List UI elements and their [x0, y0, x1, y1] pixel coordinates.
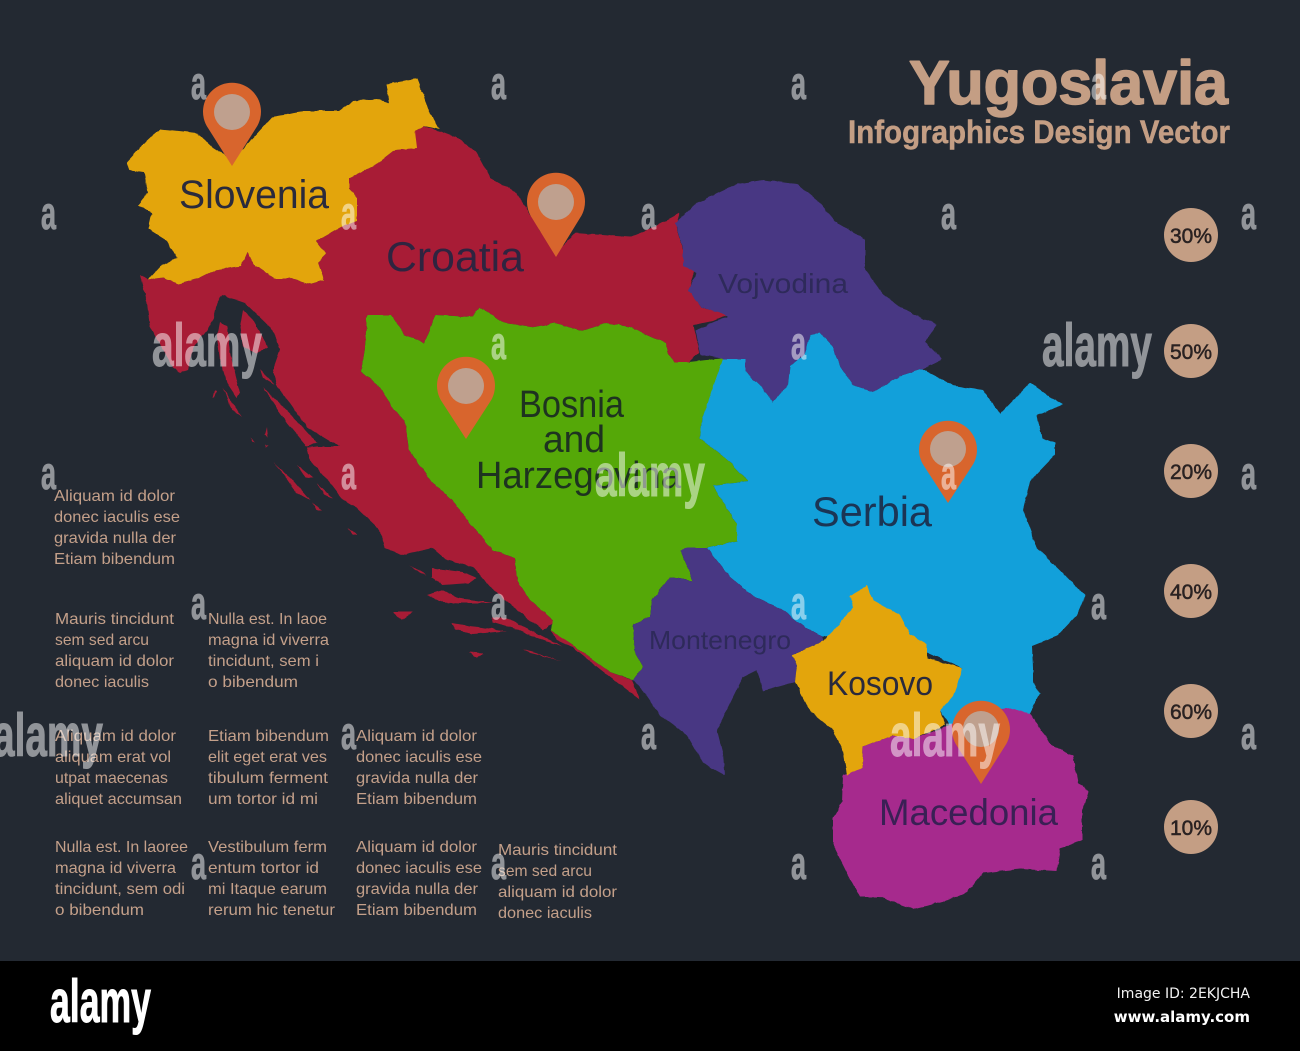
watermark pattern: a — [341, 187, 356, 239]
map of Yugoslavia — [127, 79, 1088, 909]
region: Montenegro — [633, 548, 823, 775]
badge 40%: 40% — [1170, 581, 1212, 604]
watermark wordmarks — [0, 312, 1152, 769]
watermark pattern: a — [491, 577, 506, 629]
text block 5: elit eget erat ves — [208, 749, 327, 766]
watermark pattern: a — [1091, 577, 1106, 629]
text block 3 — [208, 611, 329, 691]
badge 30% — [1164, 208, 1218, 262]
text block 2: donec iaculis — [55, 674, 149, 691]
text block 1: Etiam bibendum — [54, 551, 175, 568]
watermark pattern: a — [341, 707, 356, 759]
website: www.alamy.com — [1114, 1008, 1250, 1026]
watermark pattern: a — [491, 837, 506, 889]
text block 9: gravida nulla der — [356, 881, 479, 898]
watermark pattern: a — [341, 447, 356, 499]
text block 1: donec iaculis ese — [54, 509, 180, 526]
country label: Bosnia and Harzegovina: and — [543, 419, 605, 461]
watermark pattern: a — [791, 317, 806, 369]
region: Kosovo — [792, 586, 963, 775]
watermark pattern: a — [791, 57, 806, 109]
text block 5: tibulum ferment — [208, 770, 329, 787]
text block 8: mi Itaque earum — [208, 881, 327, 898]
text block 9: Etiam bibendum — [356, 902, 477, 919]
country label: Bosnia and Harzegovina: Bosnia — [519, 384, 625, 426]
region: Croatia — [140, 126, 727, 700]
text block 8 — [208, 839, 336, 919]
watermark pattern: a — [1241, 707, 1256, 759]
watermark wordmarks: alamy — [152, 312, 262, 379]
islands — [240, 310, 268, 353]
watermark pattern: a — [491, 317, 506, 369]
watermark pattern: a — [1241, 447, 1256, 499]
text block 7: Nulla est. In laoree — [55, 839, 188, 856]
watermark pattern: a — [191, 837, 206, 889]
text block 8: Vestibulum ferm — [208, 839, 327, 856]
text block 6 — [356, 728, 482, 808]
watermark pattern: a — [941, 447, 956, 499]
text block 3: Nulla est. In laoe — [208, 611, 327, 628]
text block 4: aliquam erat vol — [55, 749, 171, 766]
text block 10 — [498, 842, 618, 922]
region: Vojvodina — [675, 180, 942, 402]
country label: Vojvodina: Vojvodina — [718, 268, 848, 299]
text block 1: gravida nulla der — [54, 530, 177, 547]
pin: Slovenia — [203, 83, 261, 166]
text block 4: Aliquam id dolor — [55, 728, 177, 745]
badge 50% — [1164, 324, 1218, 378]
watermark pattern: a — [641, 187, 656, 239]
watermark pattern: a — [41, 187, 56, 239]
watermark pattern: a — [1091, 57, 1106, 109]
text block 6: gravida nulla der — [356, 770, 479, 787]
text block 7: magna id viverra — [55, 860, 176, 877]
watermark pattern: a — [491, 57, 506, 109]
text block 10: sem sed arcu — [498, 863, 592, 880]
watermark wordmarks: alamy — [890, 702, 1000, 769]
text block 9 — [356, 839, 482, 919]
percent badges — [1164, 208, 1218, 854]
text block 8: entum tortor id — [208, 860, 319, 877]
text block 8: rerum hic tenetur — [208, 902, 336, 919]
text block 4: utpat maecenas — [55, 770, 168, 787]
text block 1: Aliquam id dolor — [54, 488, 176, 505]
text block 9: donec iaculis ese — [356, 860, 482, 877]
badge 10% — [1164, 800, 1218, 854]
badge 60%: 60% — [1170, 701, 1212, 724]
watermark pattern: a — [791, 837, 806, 889]
badge 60% — [1164, 684, 1218, 738]
text block 7: tincidunt, sem odi — [55, 881, 185, 898]
region: Macedonia — [833, 708, 1088, 909]
text block 6: Aliquam id dolor — [356, 728, 478, 745]
country label: Bosnia and Harzegovina — [476, 384, 682, 497]
text block 9: Aliquam id dolor — [356, 839, 478, 856]
text block 4: aliquet accumsan — [55, 791, 182, 808]
country label: Macedonia: Macedonia — [879, 792, 1058, 833]
text block 10: aliquam id dolor — [498, 884, 618, 901]
text block 7: o bibendum — [55, 902, 144, 919]
footer logo: alamy — [50, 968, 151, 1035]
watermark pattern: a — [941, 187, 956, 239]
badge 40% — [1164, 564, 1218, 618]
region: Bosnia and Harzegovina — [361, 307, 748, 680]
text block 2: sem sed arcu — [55, 632, 149, 649]
watermark pattern: a — [1091, 837, 1106, 889]
pin: Croatia — [527, 173, 585, 257]
region: Serbia — [700, 333, 1085, 730]
badge 30%: 30% — [1170, 225, 1212, 248]
text block 10: donec iaculis — [498, 905, 592, 922]
text block 5: Etiam bibendum — [208, 728, 329, 745]
footer band — [0, 961, 1300, 1051]
text block 3: o bibendum — [208, 674, 298, 691]
watermark pattern: a — [41, 447, 56, 499]
text block 6: Etiam bibendum — [356, 791, 477, 808]
southern strip — [550, 630, 640, 700]
badge 20%: 20% — [1170, 461, 1212, 484]
badge 20% — [1164, 444, 1218, 498]
text block 3: magna id viverra — [208, 632, 329, 649]
country label: Serbia: Serbia — [812, 488, 933, 535]
pin: Serbia — [919, 421, 977, 503]
pin: Bosnia — [437, 357, 495, 439]
title: Yugoslavia — [909, 49, 1228, 118]
badge 10%: 10% — [1170, 817, 1212, 840]
watermark pattern: a — [191, 577, 206, 629]
text block 2: aliquam id dolor — [55, 653, 175, 670]
country label: Croatia: Croatia — [386, 233, 525, 280]
badge 50%: 50% — [1170, 341, 1212, 364]
watermark wordmarks: alamy — [1042, 312, 1152, 379]
text block 7 — [55, 839, 188, 919]
text block 3: tincidunt, sem i — [208, 653, 319, 670]
watermark pattern: a — [191, 57, 206, 109]
text block 5 — [208, 728, 329, 808]
country label: Montenegro: Montenegro — [649, 625, 791, 655]
text block 10: Mauris tincidunt — [498, 842, 618, 859]
country label: Bosnia and Harzegovina: Harzegovina — [476, 455, 682, 497]
watermark wordmarks: alamy — [595, 442, 705, 509]
watermark pattern: a — [641, 707, 656, 759]
region: Slovenia — [127, 79, 439, 284]
pin: Macedonia — [952, 701, 1010, 784]
text block 4 — [55, 728, 182, 808]
image id: Image ID: 2EKJCHA — [1117, 986, 1250, 1002]
text block 6: donec iaculis ese — [356, 749, 482, 766]
text block 5: um tortor id mi — [208, 791, 318, 808]
text block 2 — [55, 611, 175, 691]
country label: Kosovo: Kosovo — [827, 665, 933, 703]
watermark pattern: a — [791, 577, 806, 629]
watermark pattern — [41, 57, 1256, 889]
watermark pattern: a — [1241, 187, 1256, 239]
country label: Slovenia: Slovenia — [179, 173, 330, 217]
text block 2: Mauris tincidunt — [55, 611, 175, 628]
subtitle: Infographics Design Vector — [848, 114, 1230, 150]
text block 1 — [54, 488, 180, 568]
